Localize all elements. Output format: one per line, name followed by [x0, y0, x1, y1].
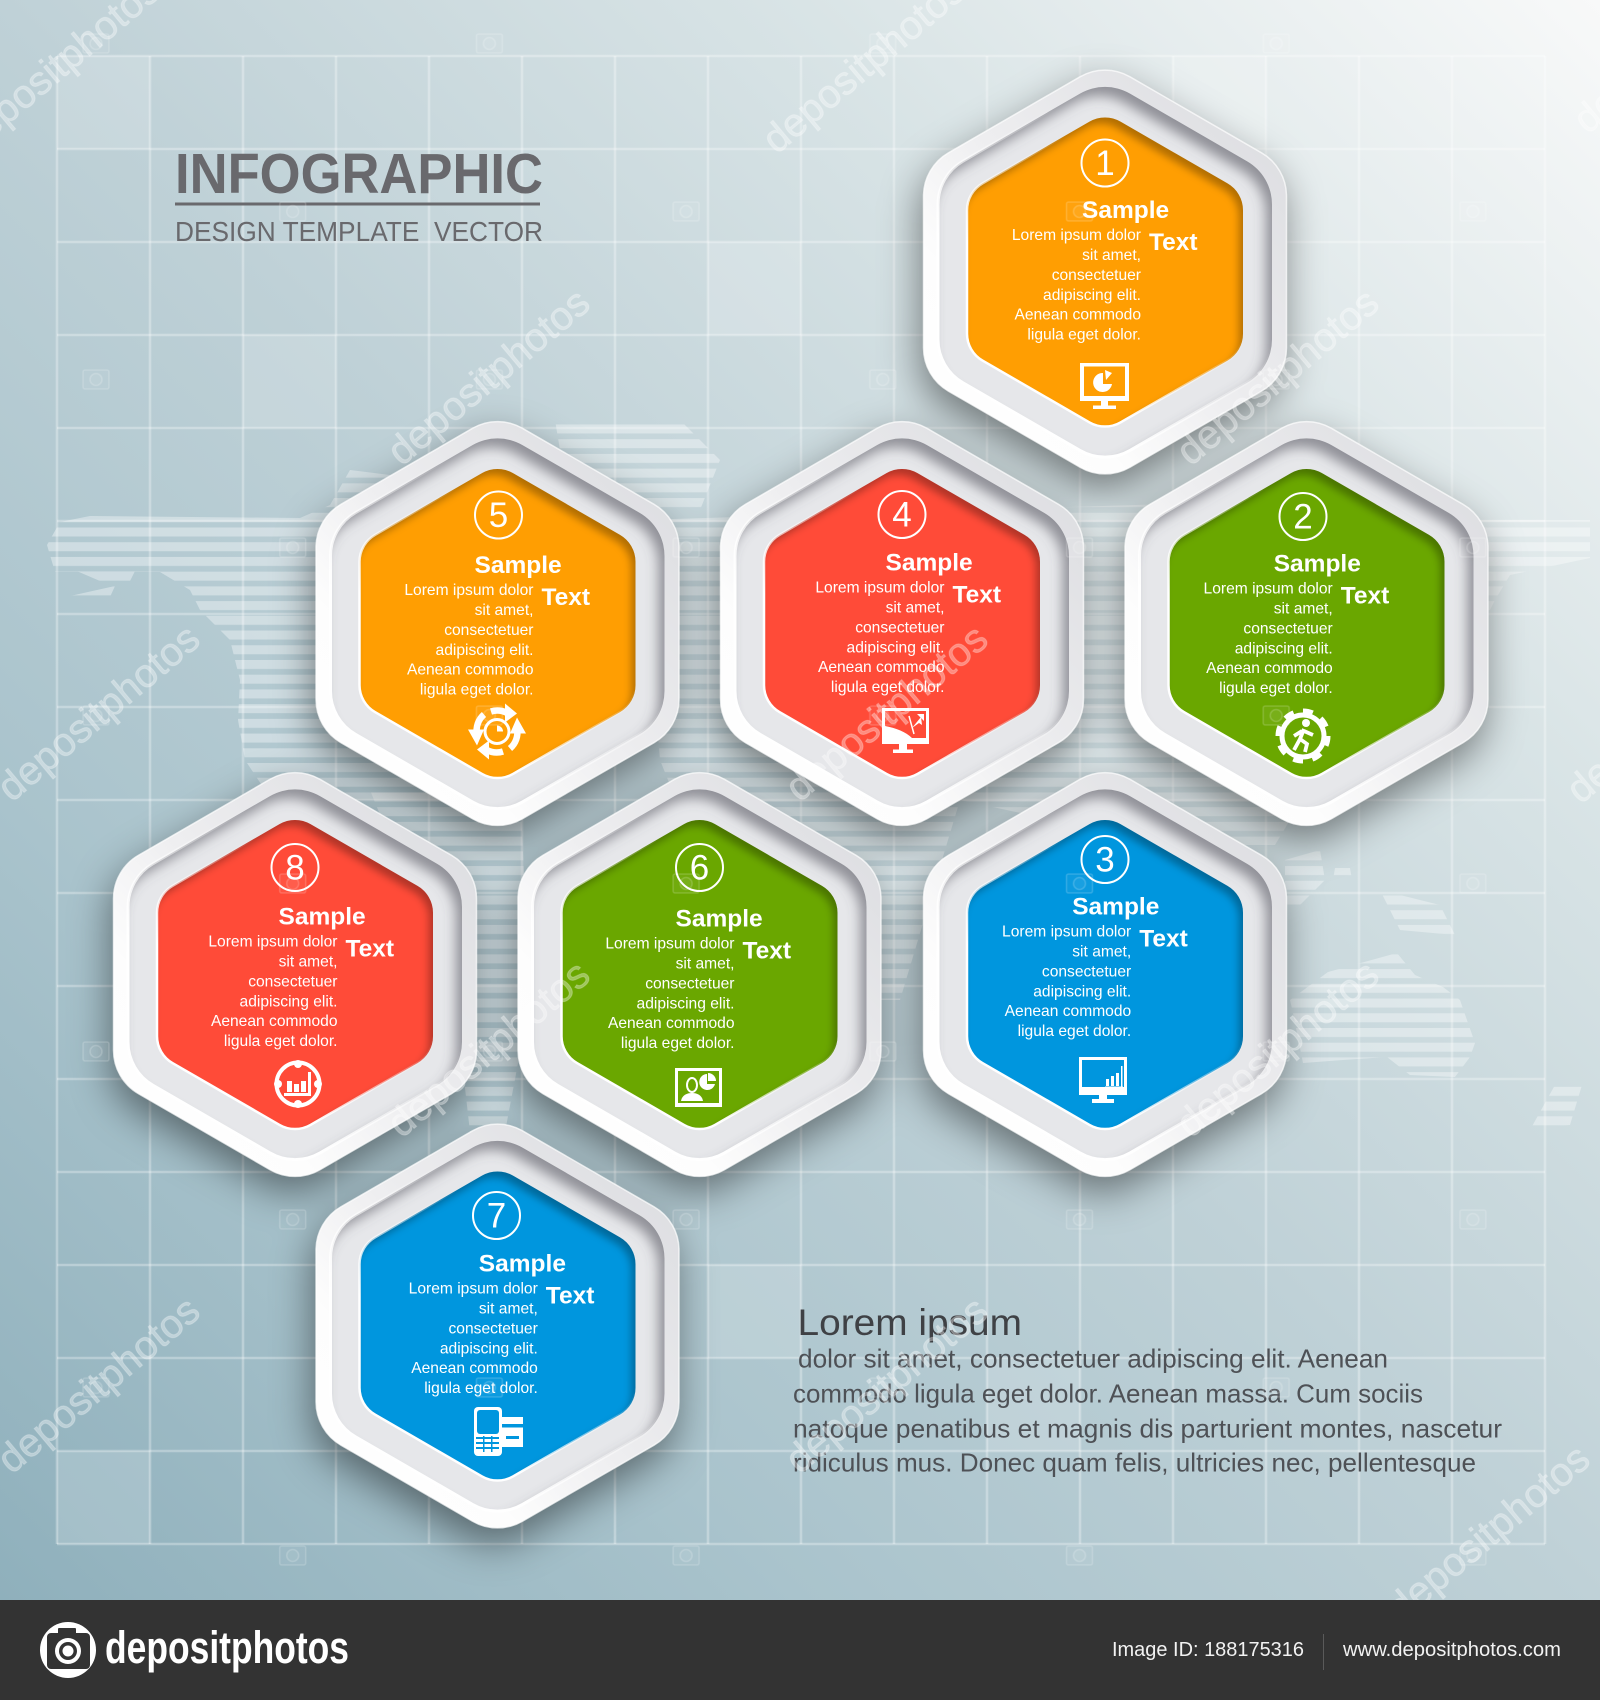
number 7: [473, 1192, 520, 1239]
text block 1: Aenean commodo: [1014, 306, 1141, 324]
text block 6: [605, 906, 791, 1052]
text block 3: ligula eget dolor.: [1018, 1023, 1131, 1040]
text block 4: Sample: [886, 550, 973, 576]
text block 1: Sample: [1082, 197, 1169, 224]
text block 6: Text: [742, 938, 791, 964]
text block 8: consectetuer: [248, 973, 338, 990]
number 6: 6: [690, 848, 709, 888]
text block 7: Lorem ipsum dolor: [409, 1280, 538, 1298]
text block: Lorem ipsum: Lorem ipsum: [798, 1302, 1022, 1343]
website url: www.depositphotos.com: [1342, 1639, 1561, 1661]
icon: gear with runner: [1278, 711, 1328, 761]
icon: depositphotos logo: [40, 1622, 96, 1678]
number 4: 4: [892, 496, 912, 534]
text block 4: sit amet,: [886, 600, 944, 616]
text block 4: ligula eget dolor.: [831, 679, 944, 696]
text block 3: consectetuer: [1042, 964, 1131, 980]
panel: hexagon 2 green: [1000, 330, 1600, 932]
text block 5: Sample: [474, 552, 562, 579]
panel: hexagon 7 blue: [192, 1032, 794, 1635]
logo wordmark: depositphotos: [105, 1622, 349, 1673]
text block 8: sit amet,: [279, 953, 338, 970]
text block 8: [208, 903, 394, 1050]
number 3: 3: [1095, 840, 1115, 880]
text block: Lorem ipsum: ridiculus mus. Donec quam felis, ultricies nec, pellentesque: [793, 1448, 1476, 1478]
text block 5: consectetuer: [444, 622, 534, 639]
text block 1: consectetuer: [1052, 267, 1141, 284]
watermarks: depositphotos: [379, 952, 598, 1146]
text block 4: Aenean commodo: [818, 659, 945, 676]
text block 3: Lorem ipsum dolor: [1002, 924, 1131, 940]
text block 1: adipiscing elit.: [1043, 287, 1141, 304]
text block 1: Text: [1149, 229, 1198, 256]
panel: hexagon 3 blue: [799, 680, 1401, 1284]
watermarks: depositphotos: [777, 616, 996, 810]
icon: target with bar chart: [274, 1060, 322, 1108]
image id: Image ID: 188175316: [1112, 1639, 1304, 1661]
text block 3: [1002, 894, 1188, 1040]
text block 8: Aenean commodo: [211, 1013, 338, 1030]
icon: presenter with pie chart: [675, 1068, 722, 1107]
text block: Lorem ipsum: dolor sit amet, consectetuer adipiscing elit. Aenean: [798, 1344, 1388, 1374]
text block 7: adipiscing elit.: [440, 1340, 538, 1358]
number 5: [475, 492, 522, 538]
number 7: 7: [487, 1196, 506, 1236]
watermarks: depositphotos: [1168, 952, 1387, 1146]
text block 1: ligula eget dolor.: [1027, 326, 1141, 344]
text block 6: consectetuer: [645, 976, 734, 992]
text block 3: adipiscing elit.: [1033, 984, 1131, 1000]
text block 2: Aenean commodo: [1206, 660, 1333, 677]
text block 3: Aenean commodo: [1005, 1003, 1132, 1020]
text block 5: adipiscing elit.: [436, 642, 534, 659]
text block 8: Lorem ipsum dolor: [208, 933, 338, 950]
text block 4: [815, 550, 1001, 696]
panel: hexagon 4 red: [596, 330, 1198, 932]
text block 1: [1012, 197, 1198, 344]
number 2: [1280, 493, 1326, 540]
text block 6: Aenean commodo: [608, 1015, 735, 1032]
text block 6: ligula eget dolor.: [621, 1035, 734, 1052]
text block 2: [1204, 551, 1389, 697]
text block 4: Text: [952, 582, 1001, 608]
text block 3: Text: [1139, 926, 1188, 952]
text block 2: Text: [1341, 583, 1389, 610]
icon: monitor with arrow: [882, 708, 929, 753]
panel: hexagon 5 orange: [192, 330, 794, 932]
text block 1: sit amet,: [1082, 247, 1141, 264]
number 5: 5: [489, 496, 508, 535]
text block: Lorem ipsum: [793, 1302, 1502, 1478]
text block 8: Sample: [278, 903, 366, 930]
number 4: [878, 491, 926, 538]
text block 2: sit amet,: [1274, 601, 1333, 618]
text block 5: Text: [542, 584, 590, 611]
text block 4: adipiscing elit.: [847, 640, 944, 656]
text block 6: Sample: [676, 906, 763, 932]
number 6: [676, 844, 723, 891]
title: DESIGN TEMPLATE VECTOR: [175, 216, 543, 247]
text block 7: Text: [546, 1282, 594, 1310]
text block 7: [409, 1250, 594, 1397]
text block 2: adipiscing elit.: [1235, 641, 1333, 658]
text block 3: Sample: [1072, 894, 1159, 920]
text block 2: Lorem ipsum dolor: [1204, 581, 1333, 598]
text block 6: adipiscing elit.: [637, 996, 734, 1012]
watermarks: depositphotos: [379, 280, 598, 474]
text block 1: Lorem ipsum dolor: [1012, 227, 1141, 244]
text block 8: adipiscing elit.: [240, 993, 338, 1010]
text block 2: Sample: [1274, 551, 1361, 578]
watermarks: depositphotos: [1379, 1436, 1598, 1630]
text block 7: ligula eget dolor.: [424, 1380, 538, 1397]
icon: monitor with pie chart: [1080, 363, 1129, 409]
number 1: 1: [1095, 144, 1115, 183]
text block 6: sit amet,: [676, 956, 734, 972]
number 8: 8: [285, 848, 305, 888]
text block 6: Lorem ipsum dolor: [605, 936, 734, 952]
panel: hexagon 1 orange: [799, 0, 1401, 581]
number 1: [1082, 140, 1128, 186]
icon: phone and card: [474, 1407, 523, 1456]
text block 7: consectetuer: [449, 1320, 538, 1338]
text block 8: ligula eget dolor.: [224, 1033, 338, 1050]
world map: [47, 420, 1590, 1132]
text block 2: consectetuer: [1243, 621, 1333, 638]
text block 5: Lorem ipsum dolor: [404, 582, 534, 599]
panel: hexagon 6 green: [394, 680, 996, 1284]
text block 5: [404, 552, 590, 698]
text block 7: Sample: [479, 1250, 566, 1278]
text block 3: sit amet,: [1072, 944, 1131, 960]
number 3: [1082, 836, 1128, 883]
text block 8: Text: [346, 935, 394, 962]
text block 7: sit amet,: [479, 1300, 538, 1318]
text block: Lorem ipsum: commodo ligula eget dolor. Aenean massa. Cum sociis: [793, 1379, 1423, 1409]
title: [175, 142, 543, 247]
text block 4: consectetuer: [855, 620, 944, 636]
text block 2: ligula eget dolor.: [1219, 680, 1333, 697]
text block 7: Aenean commodo: [411, 1360, 538, 1377]
text block 5: Aenean commodo: [407, 661, 534, 678]
number 8: [272, 844, 318, 891]
icon: circular arrows with clock: [468, 704, 526, 760]
panel: hexagon 8 red: [0, 680, 591, 1284]
number 2: 2: [1293, 498, 1313, 536]
hexagon drop shadows: [110, 86, 1484, 1544]
text block 5: sit amet,: [475, 602, 534, 619]
text block: Lorem ipsum: natoque penatibus et magnis dis parturient montes, nascetur: [793, 1413, 1502, 1443]
title: INFOGRAPHIC: [175, 142, 543, 206]
text block 4: Lorem ipsum dolor: [815, 580, 944, 596]
watermarks: depositphotos: [1168, 280, 1387, 474]
footer bar: [0, 1600, 1600, 1700]
icon: monitor with bars: [1079, 1057, 1127, 1103]
watermarks: depositphotos: [777, 1288, 996, 1482]
text block 5: ligula eget dolor.: [420, 681, 534, 698]
